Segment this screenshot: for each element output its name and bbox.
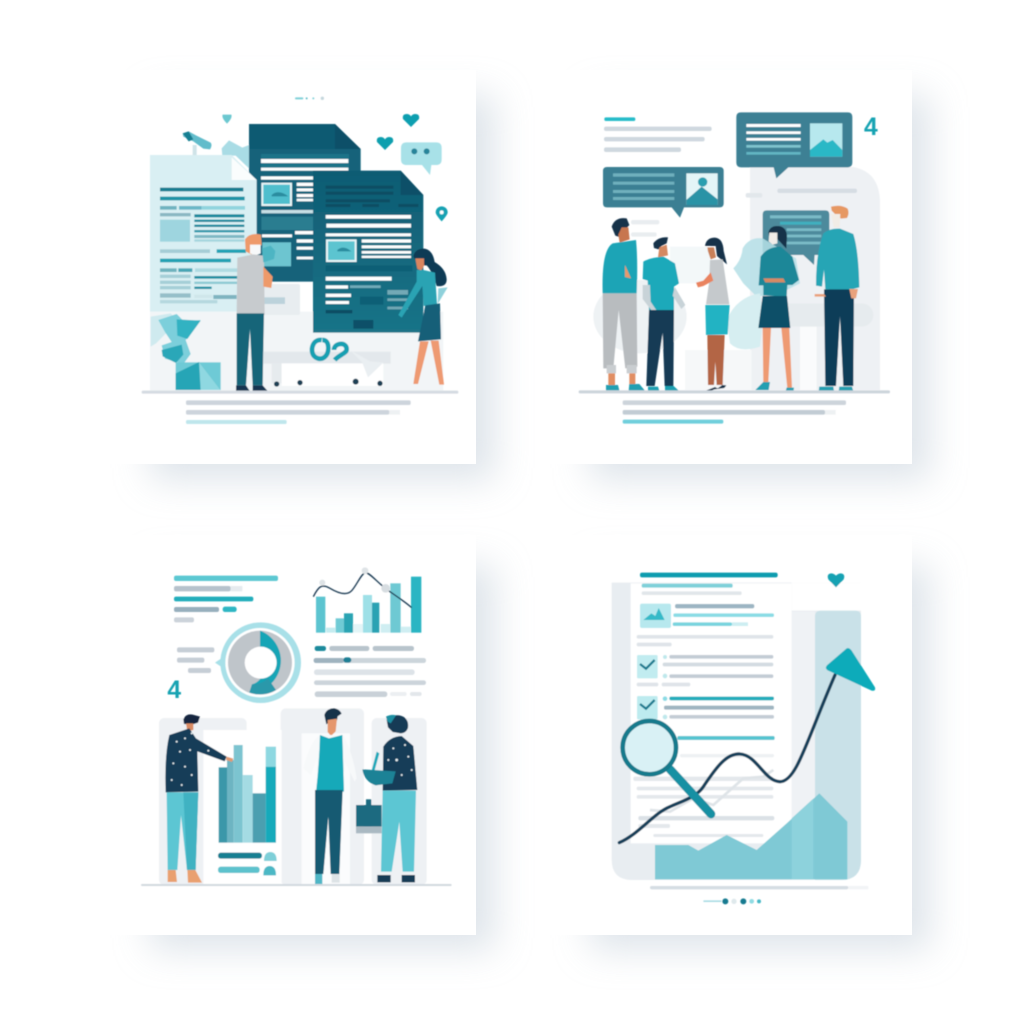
heading lines (604, 117, 712, 152)
cart with swirl (263, 340, 391, 387)
woman (398, 249, 448, 385)
small speech bubble (763, 210, 829, 265)
icon: speech bubble (401, 142, 442, 175)
person one (603, 218, 645, 390)
checklist item one (637, 655, 773, 686)
icon: heart small (377, 137, 393, 150)
light document (150, 155, 257, 312)
man with mask (236, 234, 275, 391)
caption lines (623, 400, 846, 424)
panel: documents and two people (142, 97, 458, 424)
column chart (219, 745, 276, 843)
caption lines (186, 400, 411, 424)
speech bubble with photo (603, 167, 724, 218)
icon: heart (828, 573, 844, 587)
person two (643, 237, 685, 391)
document backdrop (612, 570, 861, 880)
number four: 4 (167, 677, 181, 704)
backdrop columns (159, 708, 427, 885)
pale floor backdrop (150, 312, 443, 391)
bag (356, 799, 382, 833)
plant (151, 313, 201, 364)
secondary faint line (650, 770, 773, 812)
panel: team discussion (579, 112, 890, 424)
person with laptop (362, 715, 417, 882)
panel: growth chart with magnifier (612, 570, 875, 904)
ground line (579, 390, 890, 393)
person pointing (165, 714, 233, 883)
pale blobs (670, 238, 800, 349)
pagination dots (295, 97, 324, 100)
chart legend rows (218, 852, 277, 875)
base line (650, 886, 868, 889)
legend lines (314, 646, 426, 697)
heading lines (174, 576, 278, 622)
ground line (141, 884, 452, 886)
pale backdrop (593, 167, 880, 390)
pale caption card (263, 284, 300, 315)
panel: card backgrounds with shadows (110, 70, 930, 950)
panel: dashboard charts and team (141, 567, 452, 886)
number four: 4 (864, 114, 878, 141)
person five (815, 206, 859, 391)
trend line (619, 675, 835, 843)
bar and line chart (313, 567, 421, 633)
decorative blob (222, 140, 249, 168)
person in vest (303, 708, 357, 884)
person three (696, 238, 730, 391)
envelope (176, 362, 221, 390)
speech bubble with image (736, 112, 852, 178)
ground line (142, 391, 458, 394)
heading lines (640, 573, 778, 595)
small drop icon (222, 115, 232, 124)
donut chart (215, 622, 301, 703)
icon: magnifier (623, 721, 711, 814)
arrow head (826, 648, 875, 691)
back dark document (249, 124, 361, 282)
donut labels (177, 647, 214, 673)
icon: location pin (436, 206, 448, 221)
front dark document (313, 171, 423, 333)
pagination dots (703, 898, 761, 904)
checklist item two (637, 696, 775, 740)
area chart (655, 793, 847, 879)
faded text lines (633, 754, 774, 837)
image thumbnail row (637, 604, 774, 646)
person four (755, 226, 799, 392)
icon: camera on stand (183, 131, 212, 156)
backdrop lines (631, 189, 857, 237)
icon: heart large (403, 114, 419, 127)
